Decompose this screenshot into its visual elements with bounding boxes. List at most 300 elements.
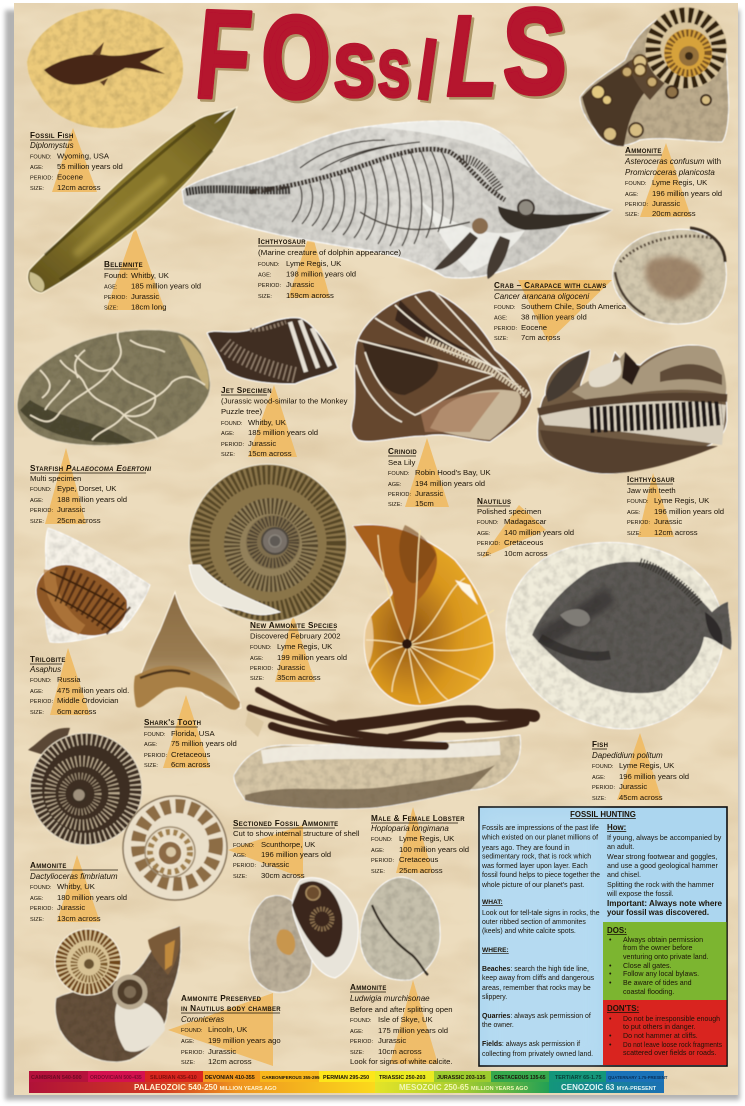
- dos text: Follow any local bylaws.: [623, 970, 699, 978]
- label: ammonite asteroceras: Asteroceras confusum with: [624, 157, 721, 166]
- title: s: [377, 21, 410, 114]
- label: ammonite asteroceras: [624, 146, 722, 218]
- introduction and where text: [481, 825, 600, 1058]
- label: male and female lobster: PERIOD:: [371, 858, 394, 864]
- geological timeline bar: SILURIAN 435-410: [150, 1075, 197, 1081]
- panel: fossil hunting: [479, 807, 727, 1066]
- label: ammonite ludwigia: 175 million years old: [378, 1026, 448, 1035]
- label: nautilus: 140 million years old: [504, 528, 574, 537]
- introduction and where text: sedimentary rock, that is rock which: [482, 854, 591, 860]
- label: sectioned fossil ammonite: PERIOD:: [233, 863, 256, 869]
- label: new ammonite species: PERIOD:: [250, 666, 273, 672]
- label: ichthyosaur: SIZE:: [258, 294, 272, 300]
- label: ichthyosaur jaw: PERIOD:: [627, 520, 650, 526]
- label: trilobite: PERIOD:: [30, 699, 53, 705]
- label: jet specimen: 185 million years old: [248, 428, 318, 437]
- label: sectioned fossil ammonite: Cut to show internal structure of shell: [233, 829, 360, 838]
- label: ammonite asteroceras: Ammonite: [625, 146, 662, 155]
- label: shark's tooth: Shark's Tooth: [144, 718, 201, 727]
- label: starfish: 188 million years old: [57, 495, 127, 504]
- label: nautilus: SIZE:: [477, 552, 491, 558]
- label: new ammonite species: 199 million years old: [277, 653, 347, 662]
- introduction and where text: WHERE:: [482, 947, 509, 954]
- label: ichthyosaur jaw: 196 million years old: [654, 507, 724, 516]
- geological timeline bar: CARBONIFEROUS 355-295: [262, 1075, 320, 1080]
- don'ts box: [603, 1000, 726, 1065]
- label: belemnite: SIZE:: [104, 306, 118, 312]
- label: jet specimen: Jurassic: [248, 439, 276, 448]
- pointer triangles: [45, 128, 691, 1066]
- label: ammonite ludwigia: Ammonite: [350, 983, 387, 992]
- label: ammonite asteroceras: 20cm across: [652, 209, 696, 218]
- label: new ammonite species: 35cm across: [277, 673, 321, 682]
- label: ammonite ludwigia: [350, 983, 453, 1066]
- label: ammonite dactylioceras: Dactylioceras fimbriatum: [30, 872, 118, 881]
- label: new ammonite species: Jurassic: [277, 663, 305, 672]
- label: trilobite: Russia: [57, 675, 81, 684]
- geological timeline bar: JURASSIC 203-135: [437, 1075, 486, 1081]
- label: ammonite preserved in nautilus body chamber: in Nautilus body chamber: [181, 1004, 281, 1013]
- label: jet specimen: AGE:: [221, 431, 235, 437]
- how text: How:: [607, 823, 626, 832]
- label: fossil fish: PERIOD:: [30, 176, 53, 182]
- fossil: ichthyosaur slab: [182, 121, 612, 279]
- dos text: •: [609, 962, 612, 970]
- label: crab: Eocene: [521, 323, 547, 332]
- geological timeline bar: MESOZOIC 250-65 MILLION YEARS AGO: [399, 1083, 529, 1092]
- label: fish dapedium: SIZE:: [592, 796, 606, 802]
- label: ammonite ludwigia: Look for signs of white calcite.: [350, 1057, 453, 1066]
- fossil: split ammonite halves: [249, 878, 358, 992]
- label: sectioned fossil ammonite: SIZE:: [233, 874, 247, 880]
- label: shark's tooth: Florida, USA: [171, 729, 215, 738]
- geological timeline bar: QUATERNARY 1.75-PRESENT: [608, 1075, 668, 1080]
- label: starfish: AGE:: [30, 498, 44, 504]
- label: male and female lobster: [371, 814, 469, 875]
- how text: and use a good geological hammer: [607, 862, 718, 870]
- don'ts text: •: [609, 1032, 612, 1040]
- label: jet specimen: Jet Specimen: [221, 386, 272, 395]
- dos text: DOS:: [607, 926, 627, 935]
- label: male and female lobster: Hoploparia longimana: [371, 824, 449, 833]
- label: ammonite ludwigia: Before and after splitting open: [350, 1005, 453, 1014]
- label: jet specimen: [221, 386, 348, 458]
- label: nautilus: Polished specimen: [477, 507, 542, 516]
- introduction and where text: outer ribbed section of ammonites: [482, 919, 586, 926]
- how text: your fossil was discovered.: [607, 908, 709, 917]
- fossil: ichthyosaur jaw: [537, 345, 727, 474]
- label: fossil fish: Eocene: [57, 172, 83, 182]
- label: shark's tooth: 6cm across: [171, 760, 210, 769]
- introduction and where text: which existed on our planet millions of: [481, 834, 598, 842]
- fossil: ammonite in nautilus body chamber: [55, 926, 181, 1062]
- label: crab: Cancer arancana oligoceni: [494, 292, 589, 301]
- fossil: ammonite with small ammonites: [580, 7, 729, 146]
- dos text: [607, 926, 709, 996]
- label: crinoid: Crinoid: [388, 447, 417, 456]
- label: ammonite asteroceras: AGE:: [625, 192, 639, 198]
- label: fish dapedium: Jurassic: [619, 782, 647, 791]
- label: belemnite: Jurassic: [131, 292, 159, 301]
- label: male and female lobster: 100 million years old: [399, 845, 469, 854]
- label: ammonite ludwigia: Ludwigia murchisonae: [350, 994, 430, 1003]
- label: fish dapedium: Fish: [592, 740, 608, 749]
- fossil: nautilus: [353, 525, 494, 706]
- label: ammonite dactylioceras: PERIOD:: [30, 906, 53, 912]
- label: ichthyosaur: Jurassic: [286, 280, 314, 289]
- label: trilobite: SIZE:: [30, 710, 44, 716]
- geological timeline bar: PERMIAN 295-250: [323, 1075, 369, 1081]
- geological timeline bar: DEVONIAN 410-355: [205, 1075, 255, 1081]
- introduction and where text: slippery.: [482, 994, 507, 1001]
- geological timeline bar: PALAEOZOIC 540-250 MILLION YEARS AGO: [134, 1083, 277, 1092]
- label: crinoid: 194 million years old: [415, 479, 485, 488]
- label: crab: AGE:: [494, 316, 508, 322]
- label: ammonite asteroceras: 196 million years old: [652, 189, 722, 198]
- dos text: •: [609, 979, 612, 987]
- don'ts text: Do not hammer at cliffs.: [623, 1032, 698, 1040]
- label: new ammonite species: New Ammonite Species: [250, 621, 338, 630]
- label: shark's tooth: PERIOD:: [144, 753, 167, 759]
- label: ammonite preserved in nautilus body chamber: SIZE:: [181, 1060, 195, 1066]
- label: ammonite ludwigia: FOUND:: [350, 1018, 372, 1024]
- label: ammonite dactylioceras: Whitby, UK: [57, 882, 96, 891]
- label: ichthyosaur jaw: AGE:: [627, 510, 641, 516]
- label: ammonite dactylioceras: Ammonite: [30, 861, 67, 870]
- introduction and where text: (keels) and white calcite spots.: [482, 928, 576, 935]
- label: ammonite asteroceras: PERIOD:: [625, 202, 648, 208]
- label: sectioned fossil ammonite: Jurassic: [261, 860, 289, 869]
- label: crinoid: Jurassic: [415, 489, 443, 498]
- label: ammonite asteroceras: Jurassic: [652, 199, 680, 208]
- label: new ammonite species: Lyme Regis, UK: [277, 642, 333, 651]
- label: crab: [494, 281, 627, 342]
- label: starfish: 25cm across: [57, 516, 101, 525]
- label: jet specimen: SIZE:: [221, 452, 235, 458]
- label: crab: 7cm across: [521, 333, 560, 342]
- dos text: •: [609, 970, 612, 978]
- label: fossil fish: Wyoming, USA: [57, 152, 110, 160]
- how text: [606, 823, 723, 917]
- label: ammonite preserved in nautilus body chamber: Coroniceras: [181, 1015, 224, 1024]
- label: starfish: Multi specimen: [30, 474, 81, 483]
- label: belemnite: Found:: [104, 271, 128, 280]
- label: jet specimen: FOUND:: [221, 421, 243, 427]
- label: sectioned fossil ammonite: 30cm across: [261, 871, 305, 880]
- label: ammonite dactylioceras: Jurassic: [57, 903, 85, 912]
- don'ts text: [607, 1004, 722, 1057]
- label: fossil fish: 55 million years old: [57, 162, 123, 171]
- fossil: crab carapace: [613, 228, 726, 324]
- how text: If young, always be accompanied by: [607, 834, 722, 842]
- label: male and female lobster: Cretaceous: [399, 855, 438, 864]
- dos text: Always obtain permission: [623, 936, 703, 944]
- fossil: belemnite: [28, 107, 237, 293]
- fossil: lobster on rock: [234, 690, 534, 809]
- label: ammonite preserved in nautilus body chamber: [181, 994, 281, 1066]
- label: shark's tooth: SIZE:: [144, 763, 158, 769]
- label: ammonite asteroceras: FOUND:: [625, 181, 647, 187]
- title: [190, 0, 566, 126]
- label: ammonite dactylioceras: SIZE:: [30, 917, 44, 923]
- label: ichthyosaur jaw: [627, 475, 724, 537]
- introduction and where text: Beaches: search the high tide line,: [482, 966, 589, 973]
- label: ammonite asteroceras: Lyme Regis, UK: [652, 178, 708, 187]
- label: new ammonite species: Discovered February 2002: [250, 632, 341, 640]
- fossil: ludwigia ammonite nodule: [360, 877, 440, 980]
- label: ammonite preserved in nautilus body chamber: PERIOD:: [181, 1050, 204, 1056]
- label: crinoid: Robin Hood's Bay, UK: [415, 468, 492, 477]
- don'ts text: Do not be irresponsible enough: [623, 1015, 720, 1023]
- label: fish dapedium: 45cm across: [619, 793, 663, 802]
- label: ammonite dactylioceras: AGE:: [30, 896, 44, 902]
- label: trilobite: 475 million years old.: [57, 686, 129, 695]
- geological timeline bar: TRIASSIC 250-203: [379, 1075, 425, 1081]
- label: sectioned fossil ammonite: Scunthorpe, UK: [261, 840, 316, 849]
- label: trilobite: FOUND:: [30, 678, 52, 684]
- label: male and female lobster: FOUND:: [371, 837, 393, 843]
- label: crab: PERIOD:: [494, 326, 517, 332]
- don'ts text: •: [609, 1015, 612, 1023]
- label: ammonite ludwigia: AGE:: [350, 1029, 364, 1035]
- introduction and where text: keep away from cliffs and dangerous: [482, 975, 595, 982]
- label: belemnite: Belemnite: [104, 260, 143, 269]
- how text: Splitting the rock with the hammer: [607, 881, 714, 889]
- label: nautilus: 10cm across: [504, 549, 548, 558]
- label: shark's tooth: 75 million years old: [171, 739, 237, 748]
- fossil: dactylioceras ammonite: [28, 728, 142, 845]
- how text: an adult.: [607, 843, 634, 851]
- geological timeline bar: ORDOVICIAN 500-435: [90, 1075, 142, 1081]
- label: sectioned fossil ammonite: 196 million years old: [261, 850, 331, 859]
- label: jet specimen: Puzzle tree): [221, 407, 262, 416]
- label: nautilus: Cretaceous: [504, 538, 543, 547]
- label: crab: Southern Chile, South America: [521, 302, 627, 311]
- label: fish dapedium: AGE:: [592, 775, 606, 781]
- dos text: from the owner before: [623, 944, 692, 952]
- don'ts text: Do not leave loose rock fragments: [623, 1041, 722, 1049]
- label: ichthyosaur: 159cm across: [286, 291, 334, 300]
- label: sectioned fossil ammonite: [233, 819, 360, 880]
- label: jet specimen: PERIOD:: [221, 442, 244, 448]
- label: new ammonite species: SIZE:: [250, 676, 264, 682]
- label: ammonite preserved in nautilus body chamber: 199 million years ago: [208, 1036, 281, 1045]
- label: trilobite: 6cm across: [57, 707, 96, 716]
- label: ichthyosaur jaw: Jaw with teeth: [627, 486, 676, 495]
- how text: and chisel.: [607, 871, 641, 879]
- label: ammonite ludwigia: PERIOD:: [350, 1039, 373, 1045]
- label: ichthyosaur jaw: Jurassic: [654, 517, 682, 526]
- label: ammonite ludwigia: Jurassic: [378, 1036, 406, 1045]
- label: starfish: Jurassic: [57, 505, 85, 514]
- dos text: venturing onto private land.: [623, 953, 709, 961]
- label: new ammonite species: FOUND:: [250, 645, 272, 651]
- label: ammonite preserved in nautilus body chamber: Jurassic: [208, 1047, 236, 1056]
- label: ichthyosaur: Lyme Regis, UK: [286, 259, 342, 268]
- don'ts text: to put others in danger.: [623, 1023, 696, 1031]
- label: ichthyosaur jaw: Ichthyosaur: [627, 475, 675, 484]
- label: nautilus: PERIOD:: [477, 541, 500, 547]
- label: male and female lobster: Lyme Regis, UK: [399, 834, 455, 843]
- label: trilobite: Trilobite: [30, 655, 66, 664]
- label: crab: FOUND:: [494, 305, 516, 311]
- introduction and where text: was formed layer upon layer. Each: [481, 863, 588, 870]
- label: fossil fish: Diplomystus: [30, 141, 74, 150]
- introduction and where text: years ago. They are found in: [482, 845, 570, 852]
- how text: will expose the fossil.: [606, 890, 674, 898]
- label: fossil fish: FOUND:: [30, 154, 52, 160]
- fossil: starfish slab: [17, 330, 210, 446]
- label: ichthyosaur jaw: 12cm across: [654, 528, 698, 537]
- title: s: [333, 11, 375, 117]
- label: ammonite dactylioceras: [30, 861, 127, 923]
- label: crinoid: [388, 447, 492, 508]
- label: trilobite: Middle Ordovician: [57, 696, 119, 705]
- introduction and where text: Look out for tell-tale signs in rocks, the: [482, 910, 600, 917]
- label: belemnite: PERIOD:: [104, 295, 127, 301]
- label: ammonite ludwigia: SIZE:: [350, 1050, 364, 1056]
- how text: Wear strong footwear and goggles,: [607, 853, 717, 861]
- label: jet specimen: (Jurassic wood-similar to the Monkey: [221, 396, 348, 406]
- label: ichthyosaur: Ichthyosaur: [258, 237, 306, 246]
- label: fish dapedium: FOUND:: [592, 764, 614, 770]
- introduction and where text: Quarries: always ask permission of: [482, 1013, 591, 1020]
- label: starfish: SIZE:: [30, 519, 44, 525]
- label: ammonite ludwigia: Isle of Skye, UK: [378, 1015, 434, 1024]
- label: ichthyosaur jaw: FOUND:: [627, 499, 649, 505]
- introduction and where text: WHAT:: [482, 899, 503, 906]
- label: starfish: Starfish Palaeocoma Egertoni: [30, 464, 151, 473]
- label: ichthyosaur: AGE:: [258, 272, 272, 278]
- label: fossil fish: 12cm across: [57, 183, 101, 192]
- introduction and where text: whole picture of our planet's past.: [481, 882, 585, 889]
- label: sectioned fossil ammonite: Sectioned Fossil Ammonite: [233, 819, 338, 828]
- label: starfish: Eype, Dorset, UK: [57, 484, 117, 493]
- geological timeline bar: CRETACEOUS 135-65: [494, 1075, 546, 1081]
- label: ammonite dactylioceras: 180 million years old: [57, 893, 127, 902]
- label: fish dapedium: 196 million years old: [619, 772, 689, 781]
- label: nautilus: Madagascar: [504, 517, 547, 526]
- label: ammonite asteroceras: SIZE:: [625, 212, 639, 218]
- dos text: Close all gates.: [623, 962, 672, 970]
- label: ammonite preserved in nautilus body chamber: AGE:: [181, 1039, 195, 1045]
- label: ammonite preserved in nautilus body chamber: Ammonite Preserved: [181, 994, 262, 1003]
- fossil: fish plate: [27, 9, 183, 128]
- label: jet specimen: Whitby, UK: [248, 418, 287, 427]
- don'ts text: scattered over fields or roads.: [623, 1049, 716, 1057]
- label: nautilus: [477, 497, 574, 558]
- label: ammonite preserved in nautilus body chamber: 12cm across: [208, 1057, 252, 1066]
- label: ichthyosaur: PERIOD:: [258, 283, 281, 289]
- label: trilobite: [29, 655, 129, 716]
- label: ammonite preserved in nautilus body chamber: FOUND:: [181, 1028, 203, 1034]
- fossil hunting heading: FOSSIL HUNTING: [570, 810, 636, 819]
- dos box: [603, 922, 726, 1000]
- label: male and female lobster: 25cm across: [399, 866, 443, 875]
- label: fish dapedium: PERIOD:: [592, 785, 615, 791]
- label: sectioned fossil ammonite: FOUND:: [233, 843, 255, 849]
- introduction and where text: Fields: always ask permission if: [482, 1041, 580, 1048]
- how text: Important: Always note where: [607, 899, 723, 908]
- label: ichthyosaur: (Marine creature of dolphin appearance): [258, 248, 401, 257]
- label: crinoid: PERIOD:: [388, 492, 411, 498]
- label: trilobite: AGE:: [30, 689, 44, 695]
- label: male and female lobster: SIZE:: [371, 869, 385, 875]
- label: ichthyosaur: FOUND:: [258, 262, 280, 268]
- label: new ammonite species: [250, 621, 347, 682]
- label: nautilus: AGE:: [477, 531, 491, 537]
- geological timeline bar: CAMBRIAN 540-500: [31, 1075, 82, 1081]
- label: fossil fish: Fossil Fish: [30, 131, 74, 140]
- label: crinoid: FOUND:: [388, 471, 410, 477]
- label: shark's tooth: AGE:: [144, 742, 158, 748]
- label: fossil fish: [30, 131, 123, 192]
- introduction and where text: areas, remember that rocks may be: [482, 985, 591, 992]
- label: belemnite: 18cm long: [131, 302, 166, 312]
- label: fossil fish: AGE:: [30, 165, 44, 171]
- fossil: sectioned ammonite: [123, 796, 227, 900]
- label: fish dapedium: Dapedidium politum: [592, 751, 663, 760]
- label: crab: 38 million years old: [521, 312, 587, 322]
- label: belemnite: Whitby, UK: [131, 271, 170, 280]
- label: ammonite preserved in nautilus body chamber: Lincoln, UK: [208, 1025, 248, 1034]
- introduction and where text: the owner.: [482, 1022, 514, 1029]
- label: male and female lobster: Male & Female Lobster: [371, 814, 465, 823]
- geological timeline bar: CENOZOIC 63 MYA-PRESENT: [561, 1083, 657, 1092]
- label: sectioned fossil ammonite: AGE:: [233, 853, 247, 859]
- label: shark's tooth: FOUND:: [144, 732, 166, 738]
- label: starfish: PERIOD:: [30, 508, 53, 514]
- label: fish dapedium: Lyme Regis, UK: [619, 761, 675, 770]
- label: ichthyosaur: [258, 237, 401, 300]
- label: starfish: [30, 464, 151, 525]
- label: jet specimen: 15cm across: [248, 449, 292, 458]
- label: ammonite dactylioceras: 13cm across: [57, 914, 101, 923]
- introduction and where text: Fossils are impressions of the past life: [482, 825, 599, 832]
- label: belemnite: AGE:: [104, 284, 118, 290]
- label: crinoid: SIZE:: [388, 502, 402, 508]
- fossil: dapedium fish: [506, 543, 731, 729]
- introduction and where text: fossil found helps to piece together the: [482, 872, 600, 879]
- dos text: •: [609, 936, 612, 944]
- dos text: Be aware of tides and: [623, 979, 692, 987]
- label: fish dapedium: [592, 740, 689, 802]
- label: male and female lobster: AGE:: [371, 848, 385, 854]
- label: crab: SIZE:: [494, 336, 508, 342]
- don'ts text: •: [609, 1041, 612, 1049]
- geological timeline bar: [29, 1071, 668, 1093]
- label: ichthyosaur: 198 million years old: [286, 270, 356, 278]
- label: shark's tooth: [144, 718, 237, 769]
- label: nautilus: Nautilus: [477, 497, 511, 506]
- introduction and where text: collecting from privately owned land.: [482, 1051, 593, 1058]
- label: crinoid: Sea Lily: [388, 458, 416, 467]
- label: ammonite dactylioceras: FOUND:: [30, 885, 52, 891]
- fossil: trilobite: [36, 528, 150, 643]
- label: nautilus: FOUND:: [477, 520, 499, 526]
- fossil: jet specimen: [207, 318, 338, 384]
- label: trilobite: Asaphus: [29, 665, 61, 674]
- label: ichthyosaur jaw: Lyme Regis, UK: [654, 496, 710, 505]
- label: belemnite: 185 million years old: [131, 282, 201, 290]
- label: ammonite ludwigia: 10cm across: [378, 1047, 422, 1056]
- fossil: new ammonite species: [189, 464, 347, 622]
- label: new ammonite species: AGE:: [250, 656, 264, 662]
- label: ichthyosaur jaw: SIZE:: [627, 531, 641, 537]
- don'ts text: DON'TS:: [607, 1004, 639, 1013]
- fossil: shark tooth: [134, 592, 241, 710]
- label: fossil fish: SIZE:: [30, 186, 44, 192]
